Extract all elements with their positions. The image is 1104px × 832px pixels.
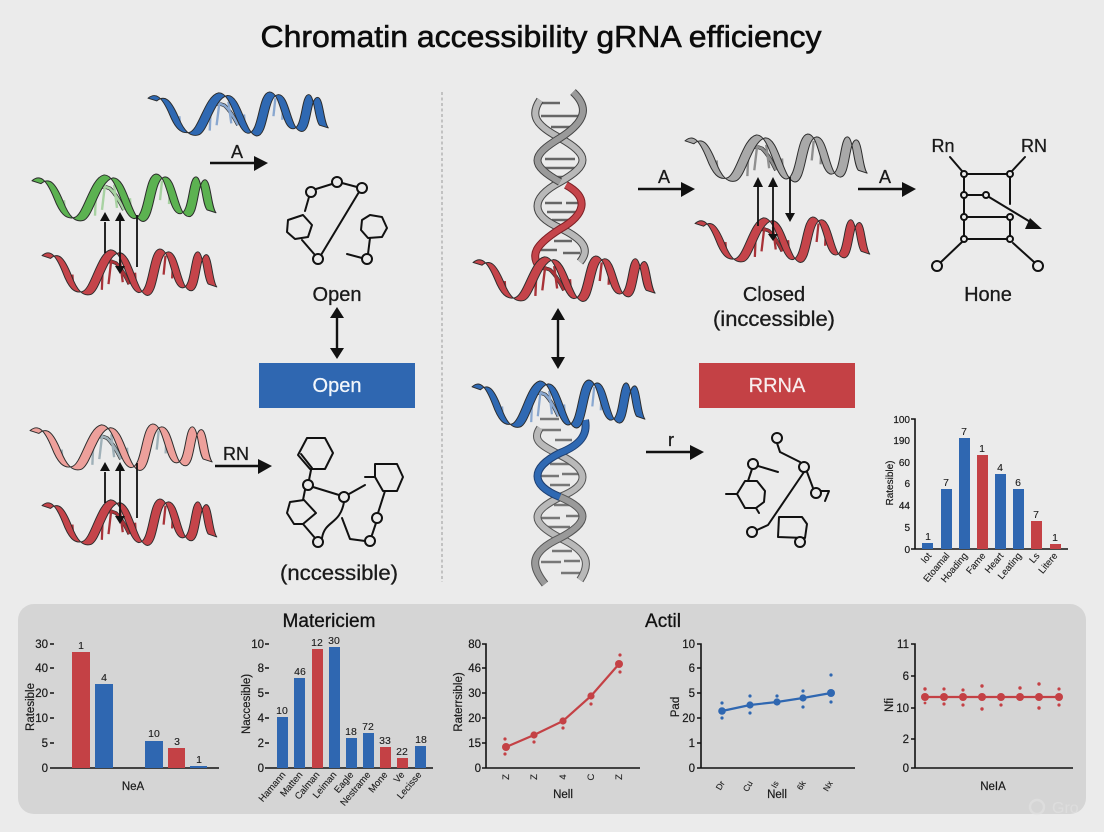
- bar chart: top right: 1: [979, 443, 985, 455]
- bar chart 1: 4: [101, 672, 107, 684]
- line chart 1: 30: [468, 688, 481, 700]
- bar chart: top right: Heart: [983, 551, 1007, 576]
- line chart 1: Z: [529, 774, 540, 780]
- line chart 3: 10: [896, 703, 909, 715]
- helix pair: green over red: [32, 174, 217, 296]
- bar chart 2: 2: [258, 738, 264, 750]
- bar chart: top right: Fame: [964, 551, 988, 577]
- bar chart 1: 40: [35, 663, 48, 675]
- bar chart 2: 12: [311, 637, 323, 649]
- bar chart 2: Hamann: [257, 770, 288, 804]
- arrow: A centre: [638, 167, 695, 197]
- bar chart 2: Naccesible): [241, 674, 253, 734]
- watermark: [1030, 800, 1079, 817]
- line chart 2: Nx: [821, 778, 835, 793]
- heading: Actil: Actil: [645, 611, 681, 632]
- line chart 1: Z: [501, 774, 512, 780]
- bar chart: top right: lot: [919, 551, 935, 566]
- box: Open: Open: [313, 375, 361, 397]
- line chart 1: C: [586, 773, 597, 780]
- bar chart 1: [25, 639, 219, 793]
- box: Open: [259, 363, 415, 408]
- bar chart: top right: Ratesible): [885, 460, 896, 506]
- line chart 1: Nell: [553, 789, 573, 801]
- molecule: inaccessible: [287, 438, 403, 547]
- bar chart: top right: 6: [1015, 477, 1021, 489]
- line chart 1: 80: [468, 639, 481, 651]
- centre divider: [441, 92, 443, 582]
- line chart 2: 5: [689, 688, 695, 700]
- line chart 2: 10: [682, 639, 695, 651]
- helix: red centre: [473, 256, 655, 302]
- arrow: A right: [858, 167, 916, 197]
- line chart 1: 46: [468, 663, 481, 675]
- bar chart: top right: Hoading: [939, 551, 970, 585]
- label: Closed (inccessible): [713, 284, 835, 331]
- line chart 2: Pad: [670, 697, 682, 717]
- bar chart: top right: Leating: [996, 551, 1024, 582]
- bar chart 2: 8: [258, 663, 264, 675]
- molecule: Hone: [931, 136, 1047, 271]
- double helix: gray with red strand: [535, 92, 585, 268]
- bar chart 2: 5: [258, 688, 264, 700]
- arrow: A top left: [210, 142, 268, 171]
- molecule: open: [287, 177, 387, 264]
- bar chart 2: Lecisse: [395, 770, 424, 802]
- bar chart 2: Leiman: [311, 770, 339, 801]
- bar chart 1: 5: [42, 738, 48, 750]
- box: RRNA: RRNA: [749, 375, 806, 397]
- bar chart 1: 10: [148, 728, 160, 740]
- molecule: Hone: RN: [1021, 136, 1047, 156]
- bar chart 1: NeA: [122, 781, 145, 793]
- line chart 1: [453, 639, 640, 801]
- bar chart 2: 4: [258, 713, 265, 725]
- line chart 3: 0: [903, 763, 909, 775]
- line chart 1: Raterrsible): [453, 672, 465, 732]
- line chart 3: 11: [897, 639, 909, 651]
- bar chart 1: 1: [196, 754, 202, 766]
- helix: blue centre: [472, 380, 645, 428]
- title: Chromatin accessibility gRNA efficiency: [260, 19, 822, 54]
- box: RRNA: [699, 363, 855, 408]
- line chart 1: Z: [614, 774, 625, 780]
- line chart 2: 6: [689, 663, 695, 675]
- line chart 2: 20: [682, 713, 695, 725]
- bar chart: top right: 1: [925, 531, 931, 543]
- label: Open: Open: [313, 284, 361, 306]
- arrow: double vertical centre: [551, 308, 565, 369]
- line chart 3: 2: [903, 734, 909, 746]
- bar chart: top right: Ls: [1027, 551, 1042, 566]
- bar chart 1: Ratesible: [25, 683, 37, 731]
- bar chart: top right: 100: [893, 415, 910, 426]
- line chart 1: 15: [468, 738, 481, 750]
- bar chart 2: [241, 635, 433, 808]
- helix pair: pink over red: [30, 424, 217, 546]
- bar chart 2: 30: [328, 635, 340, 647]
- bar chart 1: 10: [35, 713, 48, 725]
- bar chart 1: 30: [35, 639, 48, 651]
- bar chart 1: 20: [35, 688, 48, 700]
- line chart 2: Cu: [741, 779, 755, 793]
- line chart 2: Nell: [767, 789, 787, 801]
- bar chart: top right: Litere: [1037, 551, 1060, 576]
- bar chart 1: 3: [174, 736, 180, 748]
- double helix: blue and gray: [535, 419, 586, 584]
- bar chart: top right: 4: [997, 462, 1003, 474]
- line chart 2: Is: [769, 779, 781, 790]
- line chart 3: Nfi: [884, 698, 896, 712]
- bar chart 2: Matten: [278, 770, 305, 799]
- bar chart: top right: 7: [961, 426, 967, 438]
- bar chart: top right: 7: [943, 477, 949, 489]
- bar chart 2: 18: [345, 726, 357, 738]
- bar chart 2: Calman: [293, 770, 322, 802]
- helix: blue top: [148, 92, 328, 136]
- line chart 2: 6k: [795, 778, 808, 792]
- arrow: r: [646, 430, 704, 460]
- line chart 3: [884, 639, 1073, 793]
- bar chart 2: 10: [276, 705, 288, 717]
- label: (nccessible): (nccessible): [280, 562, 398, 585]
- bar chart: top right: 6: [904, 479, 910, 490]
- arrow: A right: A: [879, 167, 891, 187]
- bar chart 2: 22: [396, 746, 408, 758]
- line chart 1: 20: [468, 713, 481, 725]
- bar chart 1: 1: [78, 640, 84, 652]
- bar chart: top right: Etoamal: [921, 551, 952, 585]
- arrow: r: r: [668, 430, 674, 450]
- heading: Matericiem: Matericiem: [283, 611, 375, 632]
- line chart 2: [670, 639, 855, 801]
- bar chart: top right: [885, 415, 1068, 585]
- helix pair: gray over red: [685, 134, 870, 262]
- panel: bottom charts: [18, 604, 1086, 817]
- line chart 3: 6: [903, 671, 909, 683]
- bar chart: top right: 1: [1052, 532, 1058, 544]
- bar chart 1: 0: [42, 763, 48, 775]
- bar chart 2: 18: [415, 734, 427, 746]
- line chart 2: Dr: [714, 779, 727, 792]
- bar chart 2: Mone: [367, 770, 390, 795]
- line chart 1: 4: [558, 774, 569, 780]
- bar chart: top right: 0: [904, 545, 910, 556]
- bar chart 2: 0: [258, 763, 264, 775]
- arrow: double vertical left: [330, 307, 344, 359]
- bar chart: top right: 5: [904, 523, 910, 534]
- bar chart 2: Eagle: [332, 770, 356, 796]
- bar chart 2: 33: [379, 735, 391, 747]
- arrow: RN: [215, 444, 272, 474]
- line chart 2: 0: [689, 763, 695, 775]
- bar chart 2: Nestrame: [338, 770, 373, 808]
- label: Closed (inccessible): (inccessible): [713, 308, 835, 331]
- arrow: RN: RN: [223, 444, 249, 464]
- bar chart: top right: 7: [1033, 509, 1039, 521]
- label: Closed (inccessible): Closed: [743, 284, 805, 306]
- molecule: r: [726, 433, 829, 547]
- arrow: A centre: A: [658, 167, 670, 187]
- line chart 3: NeIA: [980, 781, 1006, 793]
- line chart 1: 0: [475, 763, 481, 775]
- molecule: Hone: Rn: [931, 136, 955, 156]
- watermark: Gro: [1052, 800, 1079, 817]
- bar chart 2: 10: [251, 639, 264, 651]
- bar chart: top right: 60: [899, 458, 910, 469]
- label: Hone: Hone: [964, 284, 1012, 306]
- arrow: A top left: A: [231, 142, 243, 162]
- bar chart 2: Ve: [392, 770, 407, 785]
- bar chart 2: 46: [294, 666, 306, 678]
- bar chart: top right: 44: [899, 501, 910, 512]
- line chart 2: 1: [689, 738, 695, 750]
- bar chart 2: 72: [362, 721, 374, 733]
- bar chart: top right: 190: [893, 436, 910, 447]
